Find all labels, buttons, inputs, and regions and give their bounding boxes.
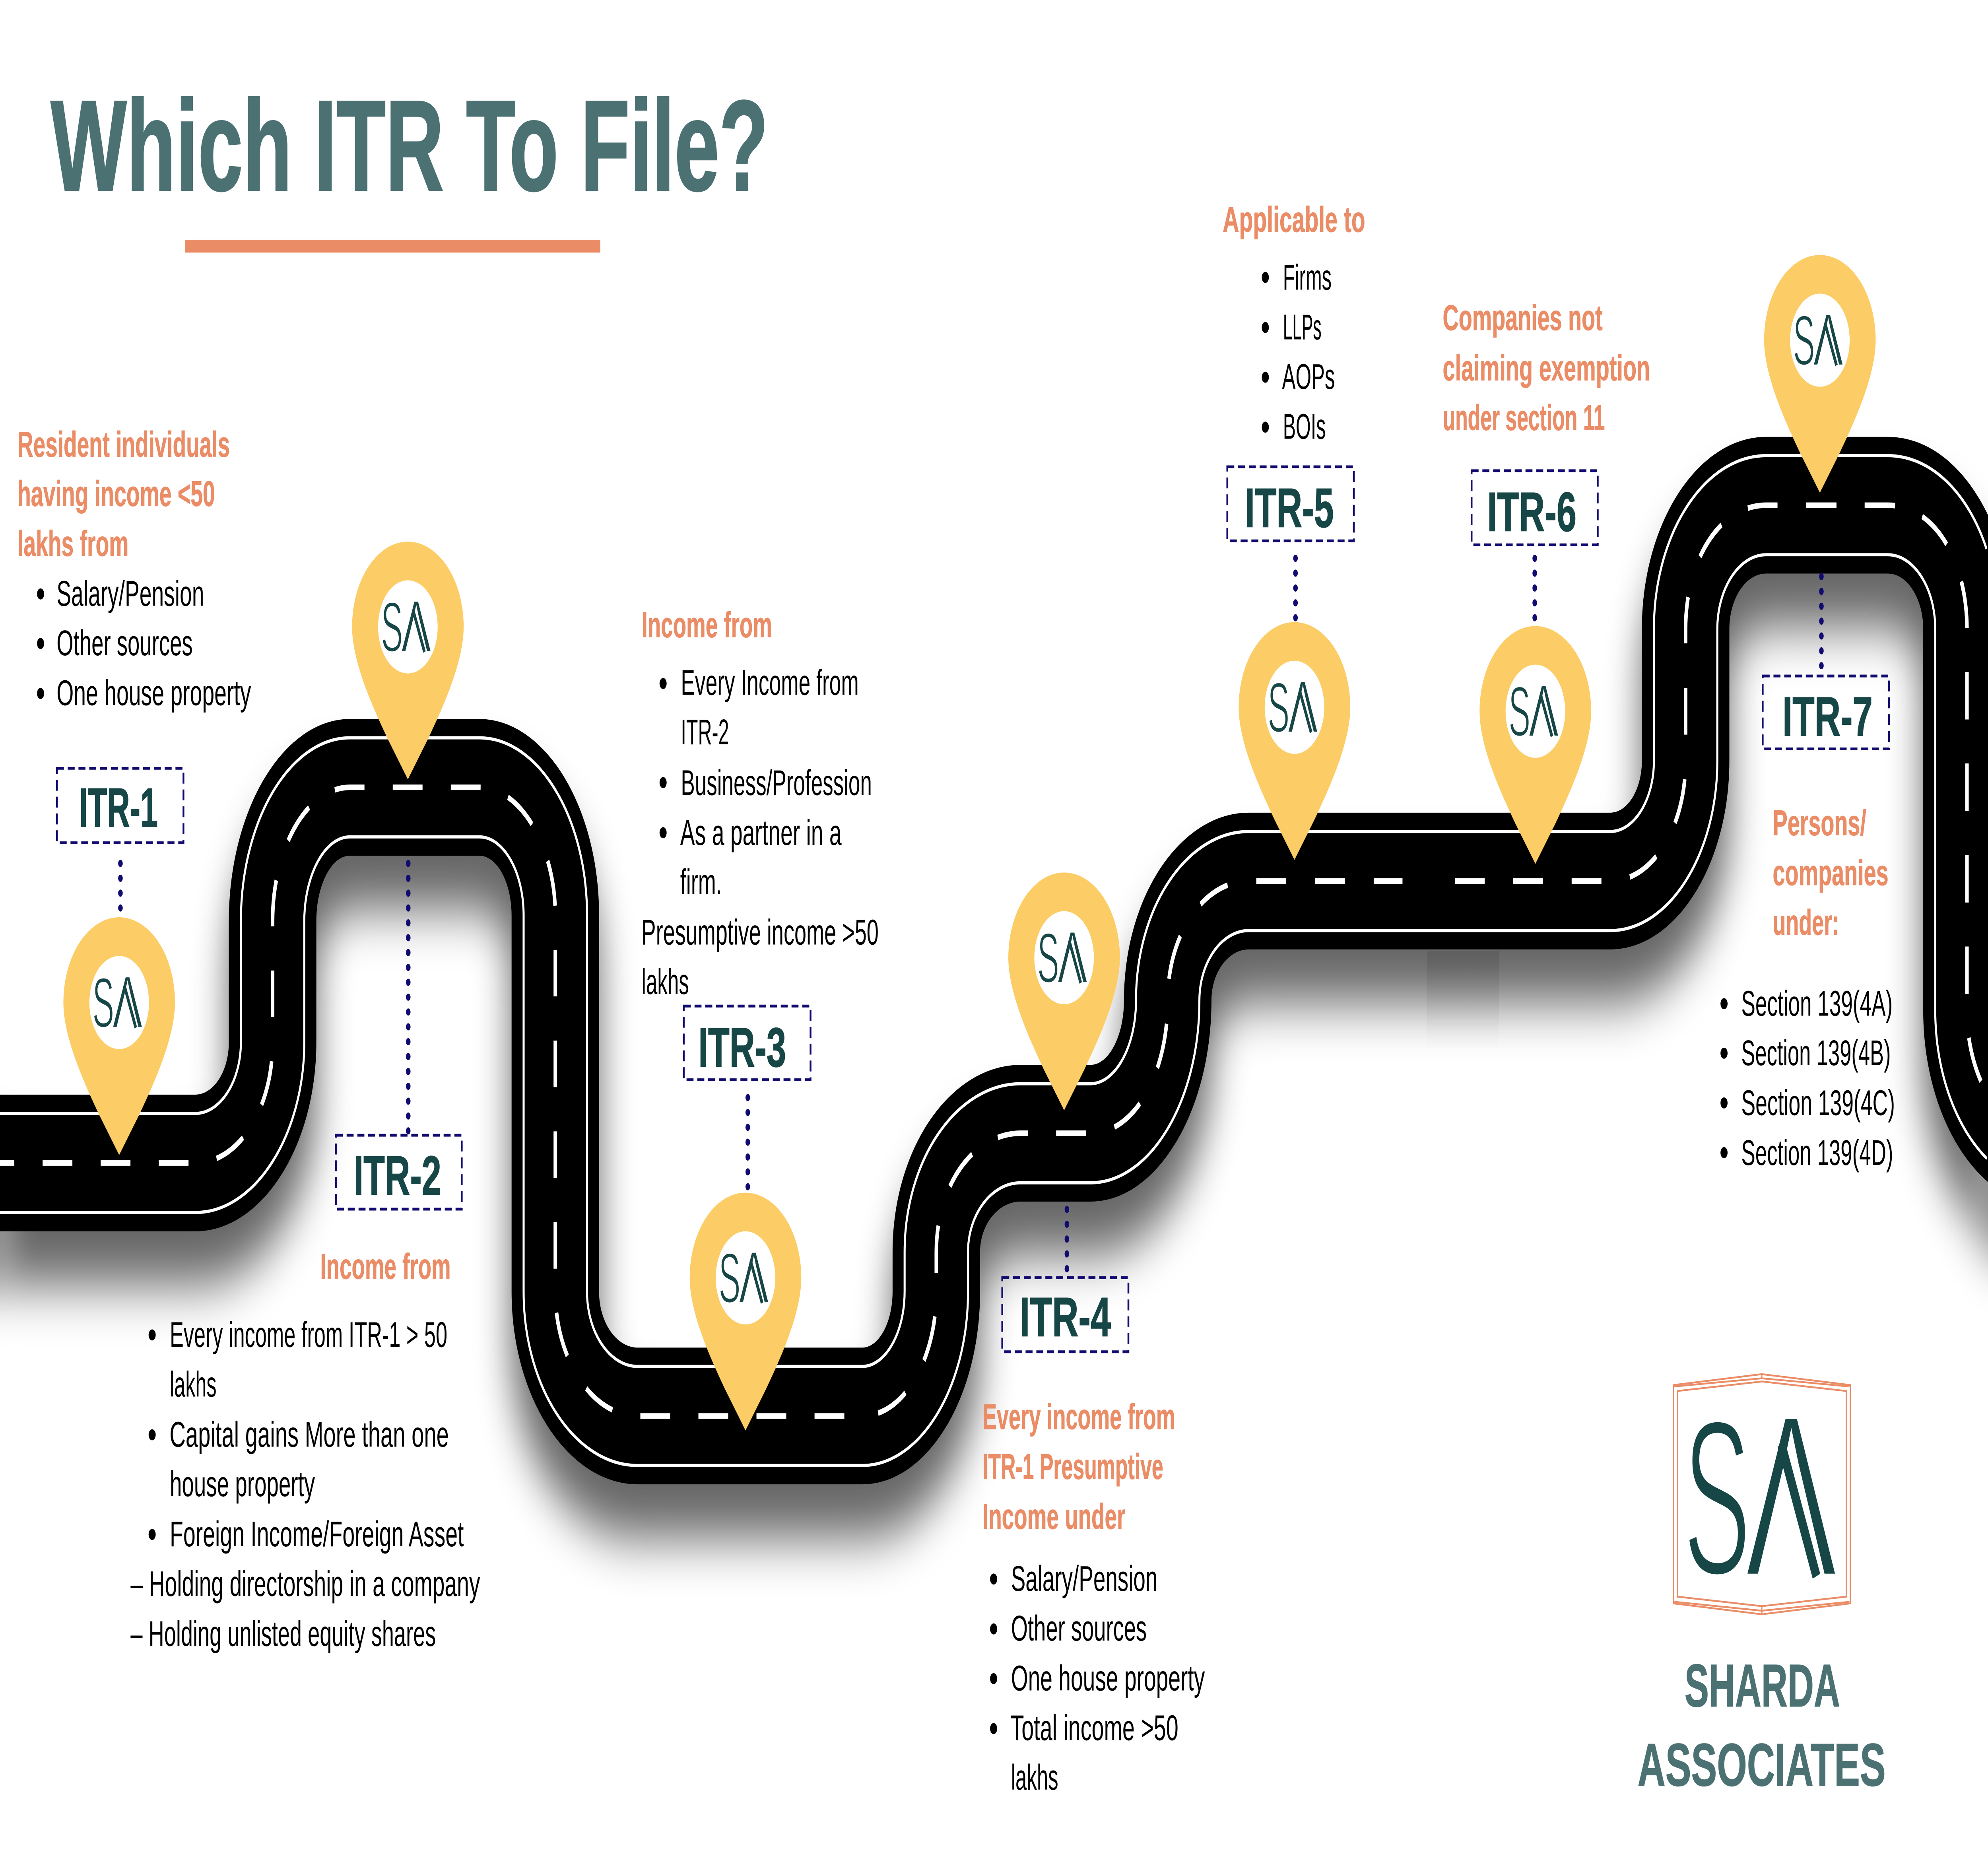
list: ITR-3 income sources: firm. [680, 862, 722, 902]
icon: location pin 7 [1764, 255, 1875, 493]
dotted connector: ITR-1 [120, 863, 121, 915]
icon: location pin 6: Λ [1528, 670, 1559, 752]
list: ITR-3 income sources: Business/Profession [681, 763, 872, 803]
list: ITR-4 income sources: One house property [1011, 1658, 1205, 1698]
dotted connector: ITR-4 [1066, 1209, 1068, 1270]
icon: location pin 3 [690, 1193, 801, 1431]
dotted connector: ITR-3 [747, 1097, 749, 1199]
list: ITR-5 entities: AOPs [1282, 357, 1335, 396]
heading: ITR-1 applicability [17, 425, 230, 563]
icon: location pin 1: Λ [112, 961, 143, 1044]
heading: ITR-1 applicability: having income <50 [17, 474, 215, 514]
icon: location pin 6 [1479, 626, 1591, 864]
list: ITR-1 income sources: One house property [56, 673, 251, 713]
brand name [1638, 1652, 1886, 1799]
list: ITR-1 income sources [37, 574, 251, 713]
heading: ITR-7: companies [1773, 853, 1889, 893]
label: ITR-3: ITR-3 [698, 1016, 786, 1078]
list: ITR-7 sections [1720, 984, 1895, 1173]
list: ITR-3 income sources: Every Income from [681, 662, 859, 703]
list: ITR-3 income sources: Presumptive income >50 [642, 912, 879, 952]
heading: ITR-4: Income under [982, 1497, 1125, 1536]
label: ITR-5 [1227, 467, 1354, 541]
panel: ITR-6 details: Companies not [1443, 298, 1603, 338]
list: ITR-4 income sources: Salary/Pension [1011, 1559, 1157, 1598]
list: ITR-3 income sources: As a partner in a [680, 813, 842, 852]
panel: ITR-7 details [1720, 803, 1895, 1173]
label: ITR-7 [1763, 676, 1889, 749]
dotted connector: ITR-5 [1295, 558, 1296, 634]
list: ITR-5 entities: Firms [1283, 257, 1332, 297]
icon: location pin 1: S [92, 963, 114, 1042]
heading: ITR-1 applicability: Resident individuals [17, 425, 230, 464]
label: ITR-1 [57, 768, 183, 843]
brand name: ASSOCIATES [1638, 1732, 1886, 1799]
icon: location pin 3: S [718, 1238, 741, 1318]
icon: location pin 1 [63, 917, 175, 1155]
list: ITR-3 income sources: lakhs [642, 962, 689, 1002]
dotted connector: ITR-7 [1821, 577, 1822, 668]
list: ITR-2 income sources: Foreign Income/Foreign Asset [170, 1514, 464, 1554]
label: ITR-6 [1472, 471, 1598, 545]
list: ITR-2 income sources: Every income from ITR-1 > 50 [170, 1315, 447, 1354]
logo: SA emblem with frame [1673, 1367, 1850, 1625]
heading: ITR-3: Income from [642, 605, 772, 645]
label: ITR-3 [684, 1006, 811, 1080]
panel: ITR-6 details: under section 11 [1443, 398, 1605, 437]
icon: location pin 2: S [381, 587, 403, 666]
list: ITR-5 entities: LLPs [1283, 307, 1322, 347]
label: ITR-1: ITR-1 [79, 777, 158, 839]
label: ITR-4 [1002, 1278, 1128, 1352]
icon: location pin 4: Λ [1057, 916, 1088, 999]
list: ITR-2 income sources: Capital gains More than one [169, 1414, 449, 1454]
list: ITR-4 income sources: Total income >50 [1010, 1708, 1178, 1748]
icon: location pin 4 [1008, 872, 1120, 1110]
brand name: SHARDA [1685, 1652, 1840, 1720]
dotted connector: ITR-6 [1534, 558, 1536, 634]
list: ITR-2 income sources: – Holding directorship in a company [130, 1564, 480, 1604]
icon: location pin 3: Λ [739, 1236, 769, 1319]
label: ITR-2: ITR-2 [354, 1144, 441, 1206]
heading: ITR-5: Applicable to [1223, 200, 1365, 239]
label: ITR-7: ITR-7 [1782, 685, 1873, 748]
heading: ITR-7: under: [1773, 903, 1839, 942]
list: ITR-7 sections: Section 139(4B) [1741, 1033, 1891, 1073]
icon: location pin 5: Λ [1287, 666, 1318, 748]
list: ITR-4 income sources: Other sources [1011, 1608, 1147, 1648]
list: ITR-7 sections: Section 139(4C) [1741, 1083, 1895, 1122]
label: ITR-2 [336, 1135, 462, 1209]
icon: location pin 5 [1239, 622, 1350, 860]
heading: ITR-2: Income from [320, 1247, 451, 1286]
panel: ITR-2 details [130, 1247, 480, 1654]
list: ITR-2 income sources: – Holding unlisted equity shares [130, 1614, 436, 1654]
heading: ITR-1 applicability: lakhs from [17, 524, 128, 563]
list: ITR-3 income sources: ITR-2 [681, 712, 729, 752]
panel: ITR-5 details [1223, 200, 1365, 447]
list: ITR-3 income sources [642, 662, 879, 1002]
list: ITR-5 entities: BOIs [1283, 407, 1326, 447]
heading: ITR-7: Persons/ [1773, 803, 1866, 843]
label: ITR-4: ITR-4 [1020, 1286, 1111, 1348]
list: ITR-2 income sources: lakhs [170, 1364, 217, 1404]
logo: SA emblem with frame: S [1683, 1374, 1751, 1622]
list: ITR-4 income sources [990, 1559, 1205, 1797]
list: ITR-1 income sources: Other sources [56, 623, 193, 663]
logo: SA emblem with frame: Λ [1745, 1367, 1839, 1625]
heading: ITR-4 [982, 1397, 1175, 1536]
label: ITR-5: ITR-5 [1245, 477, 1334, 539]
icon: location pin 5: S [1268, 668, 1289, 747]
list: ITR-5 entities [1262, 257, 1335, 447]
list: ITR-4 income sources: lakhs [1011, 1757, 1058, 1797]
panel: ITR-1 details [17, 425, 251, 713]
icon: location pin 2 [352, 542, 464, 779]
icon: location pin 6: S [1508, 672, 1530, 751]
list: ITR-1 income sources: Salary/Pension [56, 574, 204, 614]
panel: ITR-4 details [982, 1397, 1205, 1797]
dotted connector: ITR-2 [408, 863, 409, 1131]
heading: ITR-7 [1773, 803, 1889, 942]
label: ITR-6: ITR-6 [1487, 481, 1576, 543]
icon: location pin 7: S [1793, 300, 1815, 380]
list: ITR-7 sections: Section 139(4D) [1741, 1133, 1893, 1173]
panel: ITR-6 details [1443, 298, 1650, 437]
panel: ITR-6 details: claiming exemption [1443, 348, 1650, 388]
icon: location pin 2: Λ [401, 585, 431, 668]
road with shadow and lane markings [0, 437, 1988, 1484]
list: ITR-2 income sources: house property [170, 1464, 315, 1504]
list: ITR-2 income sources [130, 1315, 480, 1654]
icon: location pin 7: Λ [1813, 299, 1844, 381]
title underline [185, 240, 600, 252]
panel: ITR-3 details [642, 605, 879, 1002]
icon: location pin 4: S [1037, 918, 1059, 998]
list: ITR-7 sections: Section 139(4A) [1741, 984, 1893, 1023]
heading: ITR-4: ITR-1 Presumptive [982, 1447, 1163, 1487]
heading: ITR-4: Every income from [982, 1397, 1175, 1437]
title: Which ITR To File? [51, 74, 768, 217]
